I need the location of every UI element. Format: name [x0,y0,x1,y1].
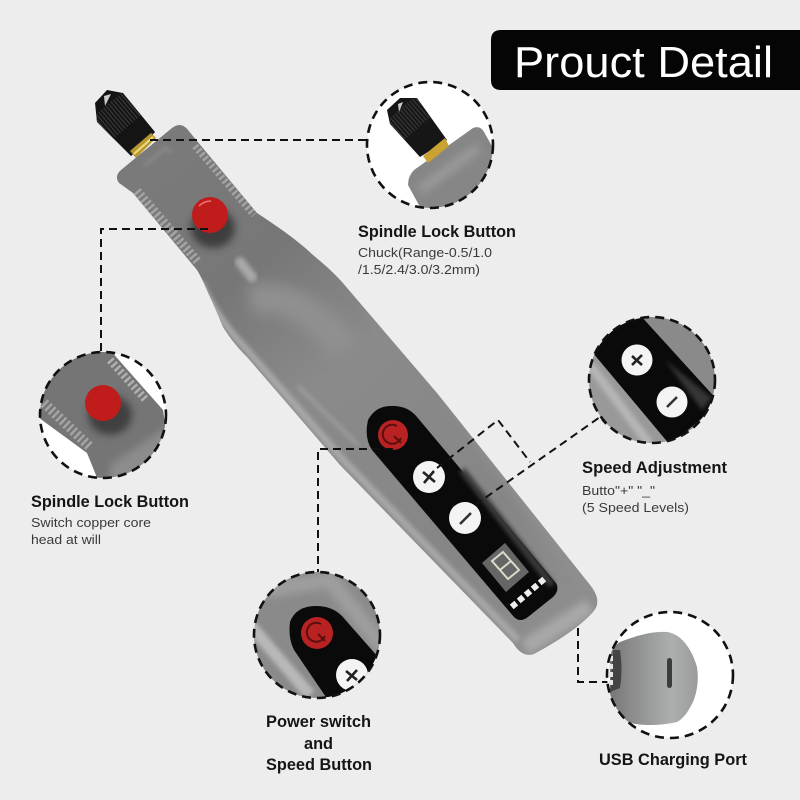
shaft arrow mark [144,148,172,166]
control panel [367,406,557,620]
tool body [117,125,597,655]
text: speed adjustment: (5 Speed Levels) [582,500,689,515]
text: spindle lock button: Spindle Lock Button [31,493,189,511]
highlight [240,262,252,277]
text: spindle lock button: Switch copper core [31,515,151,530]
text: power switch: and [304,735,333,753]
text: speed adjustment [582,459,727,515]
text: chuck spindle lock: Chuck(Range-0.5/1.0 [358,245,492,260]
text: speed adjustment: Butto"+" "_" [582,483,655,498]
text: power switch: Power switch [266,713,371,731]
text: power switch: Speed Button [266,756,372,774]
callout: chuck close-up [367,82,500,215]
callout: power switch close-up [250,572,385,705]
text: USB port: USB Charging Port [599,751,747,769]
text: spindle lock button [31,493,189,547]
callout: spindle lock close-up [38,350,168,480]
grip ridges [137,146,254,262]
product: rotary tool [95,90,597,655]
text: chuck spindle lock: Spindle Lock Button [358,223,516,241]
callout: USB port close-up [607,612,733,738]
text: power switch [266,713,372,774]
digital display [482,543,529,592]
title badge: Prouct Detail [514,38,773,87]
leader lines [101,140,608,682]
chuck [95,90,156,158]
minus button [449,502,481,534]
text: spindle lock button: head at will [31,532,101,547]
text: chuck spindle lock: /1.5/2.4/3.0/3.2mm) [358,262,480,277]
title badge [491,30,800,90]
power button [378,420,408,450]
text: speed adjustment: Speed Adjustment [582,459,727,477]
callout: speed adjustment close-up [588,316,716,444]
spindle lock button [191,197,235,248]
plus button [413,461,445,493]
speed level indicators [510,577,546,609]
text: chuck spindle lock [358,223,516,277]
